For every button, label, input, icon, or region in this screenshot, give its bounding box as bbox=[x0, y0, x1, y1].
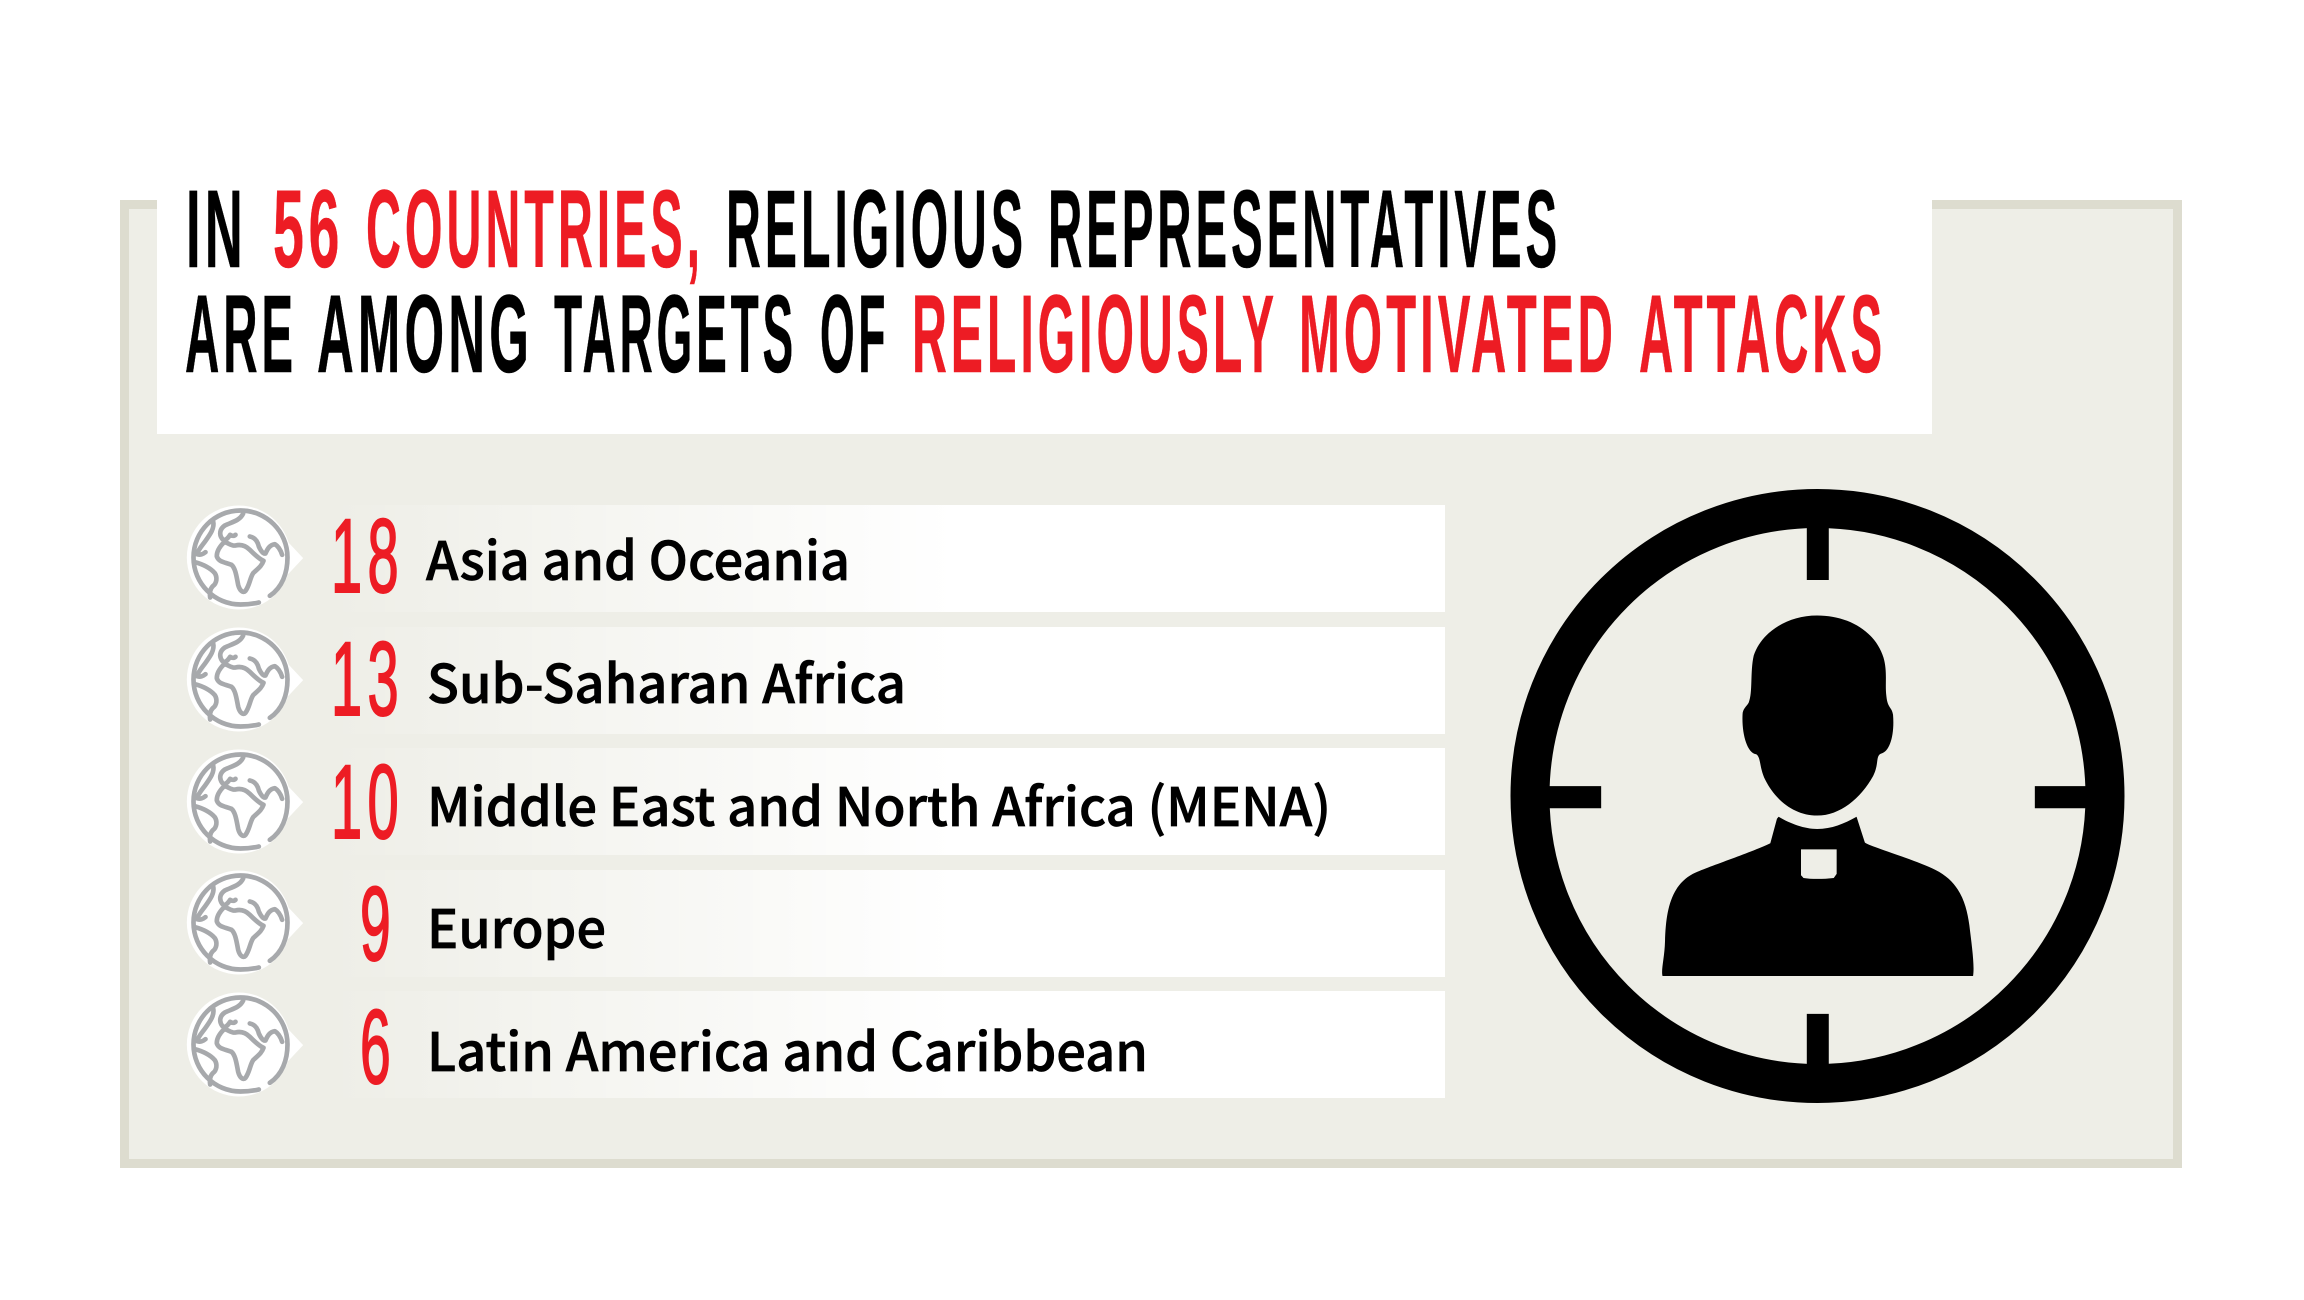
row: Europe bbox=[187, 866, 1445, 983]
number: 18: 18 bbox=[331, 498, 404, 615]
heading panel: white title box bbox=[157, 190, 1932, 434]
label: Sub-Saharan Africa: Sub-Saharan Africa bbox=[427, 643, 906, 719]
row: Latin America and Caribbean bbox=[187, 989, 1445, 1106]
target ring bbox=[1530, 508, 2105, 1084]
title: IN bbox=[186, 168, 247, 291]
panel: beige frame bbox=[124, 204, 2178, 1164]
number: 9: 9 bbox=[360, 866, 396, 983]
text: ATTACKS bbox=[1639, 273, 1886, 396]
icon: globe bbox=[187, 627, 303, 731]
icon: globe bbox=[187, 505, 303, 609]
title: RELIGIOUS bbox=[726, 168, 1027, 291]
title: COUNTRIES, bbox=[366, 168, 704, 291]
title bbox=[185, 168, 1886, 396]
title: 56 bbox=[273, 168, 344, 291]
title: REPRESENTATIVES bbox=[1048, 168, 1561, 291]
crosshair ticks bbox=[1541, 521, 2093, 1072]
number: 13: 13 bbox=[331, 621, 404, 738]
title: TARGETS bbox=[554, 273, 797, 396]
icon: globe bbox=[187, 749, 303, 853]
label: Latin America and Caribbean: Latin America and Caribbean bbox=[427, 1011, 1148, 1087]
title: MOTIVATED bbox=[1299, 273, 1617, 396]
title: AMONG bbox=[317, 273, 533, 396]
clerical collar bbox=[1801, 849, 1837, 879]
row: Asia and Oceania bbox=[187, 498, 1445, 615]
icon: crosshair target with clergy figure bbox=[1530, 508, 2105, 1084]
title: OF bbox=[820, 273, 889, 396]
label: Asia and Oceania: Asia and Oceania bbox=[426, 520, 850, 596]
icon: globe bbox=[187, 870, 303, 974]
row: Middle East and North Africa bbox=[187, 744, 1445, 861]
number: 10: 10 bbox=[331, 744, 404, 861]
label: Middle East and North Africa (MENA): Middle East and North Africa (MENA) bbox=[427, 766, 1331, 842]
row: Sub-Saharan Africa bbox=[187, 621, 1445, 738]
head bbox=[1742, 616, 1893, 816]
title: RELIGIOUSLY bbox=[912, 273, 1278, 396]
shoulders bbox=[1662, 817, 1974, 976]
title: ARE bbox=[185, 273, 297, 396]
number: 6: 6 bbox=[360, 989, 396, 1106]
label: Europe: Europe bbox=[427, 888, 606, 964]
icon: globe bbox=[187, 992, 303, 1096]
